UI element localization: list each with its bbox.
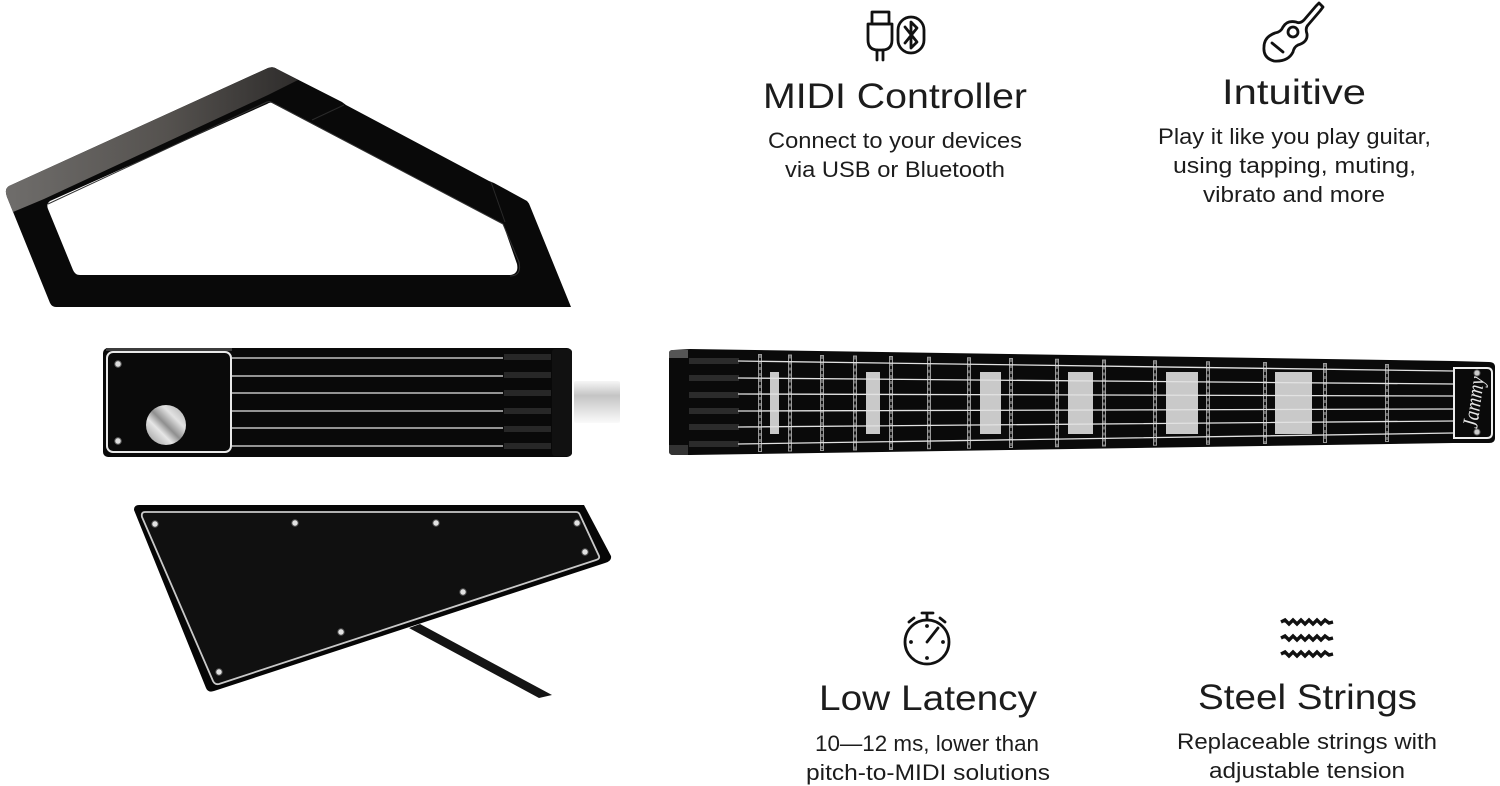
body part: neck: [669, 349, 1495, 455]
feature: Intuitive: [1158, 3, 1431, 207]
metal knob: [146, 405, 186, 445]
feature: Steel Strings: [1177, 620, 1437, 783]
screw: [1474, 429, 1480, 435]
heading: MIDI Controller: [763, 77, 1027, 116]
description: [806, 731, 1050, 785]
feature: Low Latency: [806, 613, 1050, 785]
icon: wound strings: [1281, 620, 1333, 656]
frets: [760, 354, 1387, 452]
description: [1158, 124, 1431, 207]
feature: MIDI Controller: [763, 12, 1027, 182]
USB connector: [574, 381, 620, 423]
body part: centre section: [103, 348, 572, 457]
icon: USB and Bluetooth: [868, 12, 924, 60]
heading: Low Latency: [819, 679, 1038, 718]
panel silver outline: [142, 512, 599, 684]
heading: Steel Strings: [1198, 678, 1417, 717]
description: 10—12 ms, lower than: [815, 731, 1039, 756]
body part: top frame: [6, 67, 571, 307]
kickstand: [409, 624, 552, 698]
bottom panel: [134, 505, 611, 692]
description: Replaceable strings with: [1177, 729, 1437, 754]
icon: stopwatch: [905, 613, 949, 664]
neck left end highlights: [669, 350, 688, 358]
brand logo: Jammy: [1457, 375, 1489, 430]
body part: bottom panel with stand: [134, 505, 611, 698]
strings: [738, 361, 1453, 444]
headstock plate: [1454, 368, 1492, 438]
description: Connect to your devices: [768, 128, 1022, 153]
grey top face of frame: [6, 67, 298, 212]
description: using tapping, muting,: [1173, 153, 1416, 178]
description: Play it like you play guitar,: [1158, 124, 1431, 149]
screw: [115, 361, 121, 367]
description: [768, 128, 1022, 182]
description: [1177, 729, 1437, 783]
tuner pegs: [689, 358, 739, 447]
frame inner edge: [48, 102, 520, 276]
heading: Intuitive: [1222, 73, 1366, 112]
strings: [232, 358, 503, 446]
frame seams: [312, 105, 505, 222]
neck left end lower highlight: [669, 445, 688, 455]
panel screws: [152, 520, 588, 675]
screw: [1474, 370, 1480, 376]
inlays: [770, 372, 1312, 434]
icon: guitar: [1264, 3, 1323, 61]
tuner pegs: [504, 354, 551, 449]
end block: [552, 349, 572, 456]
description: via USB or Bluetooth: [785, 157, 1005, 182]
control plate: [107, 352, 231, 452]
description: pitch-to-MIDI solutions: [806, 760, 1050, 785]
description: vibrato and more: [1203, 182, 1385, 207]
centre section top edge: [106, 348, 232, 351]
screw: [115, 438, 121, 444]
description: adjustable tension: [1209, 758, 1405, 783]
